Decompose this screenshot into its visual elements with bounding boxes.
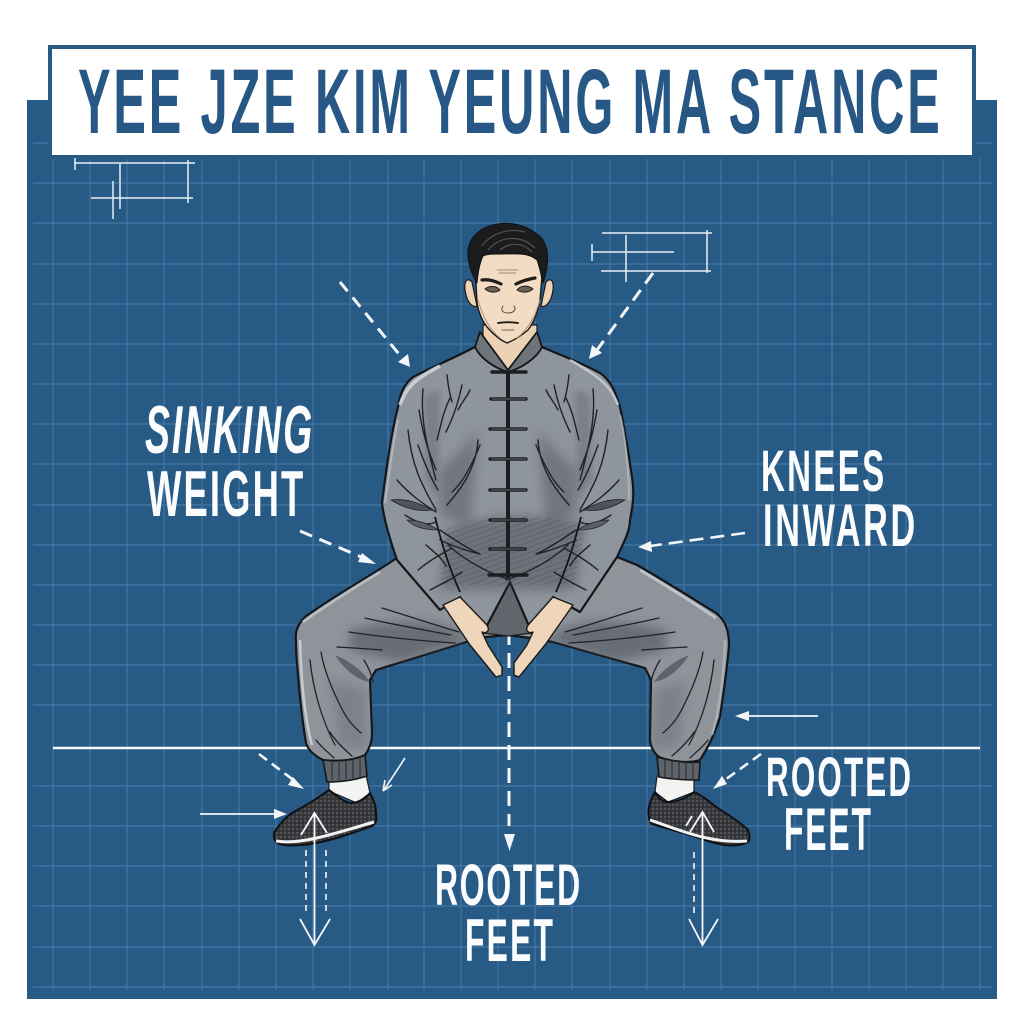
ears	[465, 280, 553, 306]
arrow: right root double arrow	[686, 812, 718, 945]
label: knees inward	[761, 439, 915, 560]
ground line	[53, 747, 980, 749]
collar	[475, 332, 542, 372]
arrow: left root double arrow	[300, 813, 330, 945]
sleeve seams	[435, 517, 581, 592]
label: rooted feet right: ROOTED	[766, 745, 911, 808]
label: sinking weight: WEIGHT	[147, 458, 303, 531]
facial features	[478, 270, 540, 338]
blueprint mark: upper right	[592, 230, 712, 282]
figure: practitioner in stance	[274, 223, 750, 846]
hands	[443, 597, 573, 677]
right shoe	[648, 792, 750, 846]
hair highlights	[482, 231, 535, 252]
label: rooted feet center: FEET	[465, 909, 553, 975]
arrow: knees inward	[638, 533, 745, 552]
grid	[33, 143, 992, 990]
blueprint mark: top left	[74, 158, 195, 219]
arrow: shoulder right	[589, 273, 653, 359]
arrow: center plumb line	[504, 630, 515, 851]
label: rooted feet center: ROOTED	[435, 853, 580, 917]
arrow: dashed left ankle	[259, 754, 304, 789]
arrow: dashed right ankle	[713, 754, 761, 789]
label: knees inward: INWARD	[763, 493, 915, 560]
label: rooted feet right: FEET	[784, 798, 871, 864]
frog closures	[489, 372, 527, 578]
label: knees inward: KNEES	[761, 439, 884, 505]
title banner: YEE JZE KIM YEUNG MA STANCE	[78, 49, 940, 153]
label: sinking weight	[145, 391, 312, 531]
hair	[468, 223, 548, 283]
face	[475, 250, 543, 343]
arrow: thin left ankle	[383, 758, 405, 791]
arrow: toward left shoe	[200, 809, 287, 819]
undershirt flap	[483, 582, 532, 636]
ankle cuffs and socks	[323, 755, 700, 803]
arrow: thin pointer right of knee	[735, 711, 818, 721]
label: sinking weight: SINKING	[145, 391, 312, 468]
label: rooted feet center	[435, 853, 580, 975]
label: rooted feet right	[766, 745, 911, 864]
trousers	[296, 557, 729, 762]
jacket	[382, 332, 633, 633]
neck	[483, 325, 537, 372]
arrow: sinking weight	[300, 531, 376, 564]
left shoe	[274, 790, 376, 845]
arrow: shoulder left	[340, 282, 410, 367]
